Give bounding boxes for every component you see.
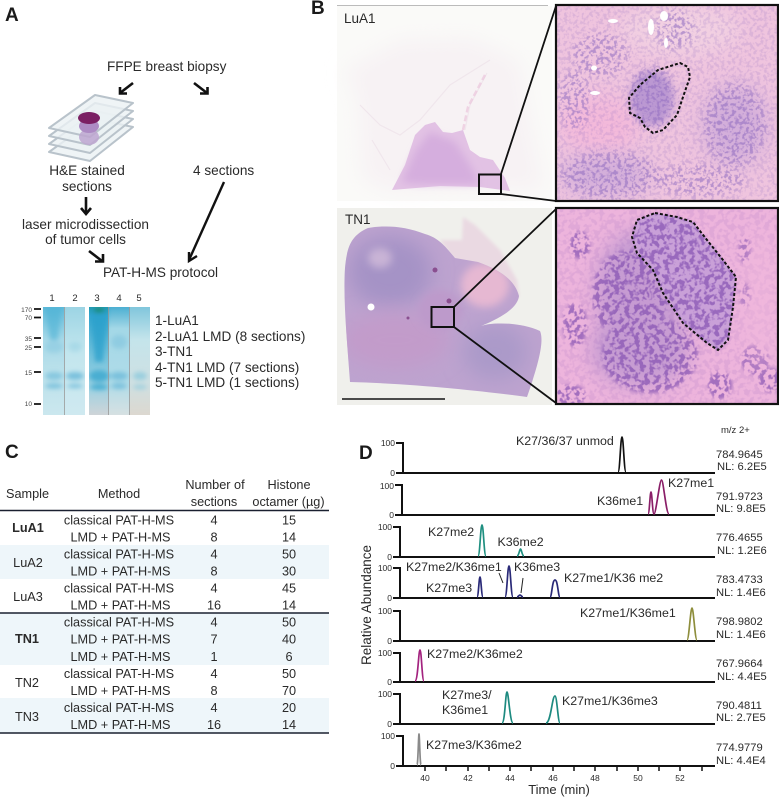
number of sections column: 1 bbox=[210, 650, 218, 664]
trace 3: K27me2 and K36me2: 776.4655 bbox=[716, 532, 763, 544]
number of sections column: 16 bbox=[207, 598, 221, 612]
number of sections column: 8 bbox=[210, 564, 218, 578]
trace 7: K27me3/K36me1 and K27me1/K36me3: 790.4811 bbox=[716, 700, 762, 712]
table header: Sample bbox=[6, 487, 49, 501]
trace 4: K27me3, K27me2/K36me1, K36me3, K27me1/K36me2: 100 bbox=[378, 563, 392, 573]
arrow: 4 sections to protocol bbox=[189, 182, 224, 261]
sample names: TN2 bbox=[15, 676, 39, 690]
histone octamer column bbox=[282, 514, 296, 732]
shaded rows bbox=[0, 545, 329, 733]
trace 3: K27me2 and K36me2: NL: 1.2E6 bbox=[717, 545, 767, 557]
text: 4 sections: 4 sections bbox=[193, 163, 254, 178]
sample names: TN3 bbox=[15, 710, 39, 724]
table header: octamer (µg) bbox=[252, 495, 325, 509]
trace 7: K27me3/K36me1 and K27me1/K36me3: 100 bbox=[378, 689, 392, 699]
histone octamer column: 14 bbox=[282, 530, 296, 544]
method column: classical PAT-H-MS bbox=[64, 701, 174, 715]
time axis labels: 46 bbox=[548, 773, 558, 783]
histone octamer column: 6 bbox=[285, 650, 293, 664]
trace 3: K27me2 and K36me2 bbox=[378, 522, 767, 562]
tumor outline bbox=[629, 63, 690, 133]
number of sections column: 8 bbox=[210, 684, 218, 698]
gel legend: 1-LuA1 bbox=[155, 313, 199, 328]
time axis labels: 48 bbox=[590, 773, 600, 783]
heading D: D bbox=[359, 443, 373, 464]
x axis title: Time (min) bbox=[528, 782, 590, 797]
scale bar bbox=[342, 398, 445, 400]
table header: Number of bbox=[185, 478, 245, 492]
histone octamer column: 30 bbox=[282, 564, 296, 578]
method column: classical PAT-H-MS bbox=[64, 667, 174, 681]
gel lane numbers: 3 bbox=[94, 293, 100, 304]
trace 8: K27me3/K36me2 with time axis: 774.9779 bbox=[716, 742, 763, 754]
table header bbox=[6, 478, 325, 509]
time axis labels bbox=[420, 773, 685, 783]
number of sections column: 7 bbox=[210, 632, 218, 646]
number of sections column: 16 bbox=[207, 718, 221, 732]
histone octamer column: 50 bbox=[282, 548, 296, 562]
table header: sections bbox=[191, 495, 237, 509]
text: PAT-H-MS protocol: PAT-H-MS protocol bbox=[103, 265, 218, 280]
trace 2: K27me1 and K36me1 bbox=[380, 476, 766, 520]
sample names bbox=[12, 521, 44, 724]
sample names: LuA1 bbox=[12, 521, 44, 535]
time axis labels: 42 bbox=[463, 773, 473, 783]
trace 4: K27me3, K27me2/K36me1, K36me3, K27me1/K36me2: K36me3 bbox=[514, 560, 560, 574]
gel lane numbers: 4 bbox=[116, 293, 122, 304]
number of sections column: 4 bbox=[210, 616, 218, 630]
trace 6: K27me2/K36me2: NL: 4.4E5 bbox=[717, 671, 767, 683]
method column: LMD + PAT-H-MS bbox=[71, 632, 170, 646]
sample names: LuA2 bbox=[13, 556, 43, 570]
gel legend bbox=[155, 313, 305, 390]
trace 2: K27me1 and K36me1: K27me1 bbox=[668, 476, 714, 490]
method column: classical PAT-H-MS bbox=[64, 582, 174, 596]
trace 4: K27me3, K27me2/K36me1, K36me3, K27me1/K36me2 bbox=[378, 560, 766, 603]
trace 2: K27me1 and K36me1: 100 bbox=[380, 481, 394, 491]
TN1 whole section bbox=[337, 208, 552, 405]
time axis labels: 52 bbox=[675, 773, 685, 783]
panel B: histology images bbox=[311, 0, 778, 405]
number of sections column: 4 bbox=[210, 701, 218, 715]
heading A: A bbox=[5, 5, 19, 26]
trace 3: K27me2 and K36me2: K27me2 bbox=[428, 525, 474, 539]
text: laser microdissection of tumor cells: laser microdissection bbox=[22, 217, 149, 232]
sample names: LuA3 bbox=[13, 590, 43, 604]
molecular weight marker: 70 bbox=[25, 315, 32, 322]
arrow: biopsy to stained sections bbox=[120, 83, 133, 94]
text: H&E stained sections: H&E stained bbox=[49, 163, 125, 178]
trace 5: K27me1/K36me1: K27me1/K36me1 bbox=[580, 606, 676, 620]
molecular weight marker bbox=[21, 307, 41, 408]
gel legend: 2-LuA1 LMD (8 sections) bbox=[155, 329, 305, 344]
gel lane numbers: 1 bbox=[49, 293, 55, 304]
text: FFPE breast biopsy: FFPE breast biopsy bbox=[107, 59, 227, 74]
time axis labels: 44 bbox=[505, 773, 515, 783]
heading C: C bbox=[5, 442, 19, 463]
LuA1 whole section bbox=[337, 6, 552, 201]
histone octamer column: 40 bbox=[282, 632, 296, 646]
method column bbox=[64, 514, 174, 732]
histone octamer column: 70 bbox=[282, 684, 296, 698]
trace 3: K27me2 and K36me2: 0 bbox=[387, 552, 392, 562]
gel legend: 3-TN1 bbox=[155, 344, 193, 359]
sample names: TN1 bbox=[15, 632, 39, 646]
molecular weight marker: 25 bbox=[25, 345, 32, 352]
trace 6: K27me2/K36me2: 0 bbox=[387, 677, 392, 687]
number of sections column: 4 bbox=[210, 667, 218, 681]
trace 1: unmodified: NL: 6.2E5 bbox=[717, 461, 767, 473]
trace 8: K27me3/K36me2 with time axis: K27me3/K36me2 bbox=[426, 738, 522, 752]
trace 5: K27me1/K36me1: 798.9802 bbox=[716, 616, 763, 628]
number of sections column: 4 bbox=[210, 548, 218, 562]
trace 7: K27me3/K36me1 and K27me1/K36me3: K27me1/K36me3 bbox=[562, 694, 658, 708]
trace 2: K27me1 and K36me1: NL: 9.8E5 bbox=[716, 503, 766, 515]
gel image bbox=[21, 293, 150, 415]
histone octamer column: 15 bbox=[282, 514, 296, 528]
text: H&E stained sections: sections bbox=[62, 179, 112, 194]
trace 4: K27me3, K27me2/K36me1, K36me3, K27me1/K36me2: NL: 1.4E6 bbox=[716, 587, 766, 599]
trace 5: K27me1/K36me1 bbox=[378, 606, 766, 646]
number of sections column: 4 bbox=[210, 514, 218, 528]
trace 6: K27me2/K36me2: 767.9664 bbox=[716, 658, 763, 670]
method column: LMD + PAT-H-MS bbox=[71, 564, 170, 578]
trace 8: K27me3/K36me2 with time axis: 0 bbox=[390, 761, 395, 771]
trace 7: K27me3/K36me1 and K27me1/K36me3: K36me1 bbox=[442, 703, 488, 717]
trace 4: K27me3, K27me2/K36me1, K36me3, K27me1/K36me2: 0 bbox=[387, 593, 392, 603]
trace 7: K27me3/K36me1 and K27me1/K36me3: K27me3/ bbox=[442, 688, 492, 702]
tumor outline bbox=[632, 213, 736, 350]
gel legend: 4-TN1 LMD (7 sections) bbox=[155, 360, 299, 375]
trace 7: K27me3/K36me1 and K27me1/K36me3 bbox=[378, 688, 766, 729]
arrow: sections to laser microdissection bbox=[81, 197, 91, 214]
histone octamer column: 45 bbox=[282, 582, 296, 596]
time axis ticks bbox=[425, 766, 702, 771]
molecular weight marker: 35 bbox=[25, 336, 32, 343]
trace 3: K27me2 and K36me2: K36me2 bbox=[498, 535, 544, 549]
panel D: extracted ion chromatograms bbox=[359, 425, 767, 797]
trace 4: K27me3, K27me2/K36me1, K36me3, K27me1/K36me2: K27me2/K36me1 bbox=[406, 560, 502, 574]
header m/z 2+: m/z 2+ bbox=[721, 425, 750, 436]
gel legend: 5-TN1 LMD (1 sections) bbox=[155, 375, 299, 390]
number of sections column: 4 bbox=[210, 582, 218, 596]
time axis labels: 50 bbox=[633, 773, 643, 783]
trace 6: K27me2/K36me2 bbox=[378, 647, 767, 687]
molecular weight marker: 170 bbox=[21, 307, 32, 314]
label TN1: TN1 bbox=[345, 212, 371, 227]
method column: classical PAT-H-MS bbox=[64, 548, 174, 562]
gel lane numbers bbox=[49, 293, 142, 304]
table header: Histone bbox=[267, 478, 311, 492]
label LuA1: LuA1 bbox=[344, 11, 376, 26]
TN1 zoom box and connector bbox=[432, 209, 556, 403]
trace 3: K27me2 and K36me2: 100 bbox=[378, 522, 392, 532]
trace 8: K27me3/K36me2 with time axis: 100 bbox=[381, 731, 395, 741]
trace 1: unmodified bbox=[381, 434, 767, 478]
trace 1: unmodified: K27/36/37 unmod bbox=[516, 434, 614, 448]
number of sections column bbox=[207, 514, 221, 732]
trace 2: K27me1 and K36me1: K36me1 bbox=[597, 494, 643, 508]
LuA1 zoom box and connector bbox=[479, 6, 556, 201]
trace 6: K27me2/K36me2: 100 bbox=[378, 648, 392, 658]
trace 7: K27me3/K36me1 and K27me1/K36me3: 0 bbox=[387, 719, 392, 729]
trace 4: K27me3, K27me2/K36me1, K36me3, K27me1/K36me2: K27me1/K36 me2 bbox=[564, 571, 663, 585]
trace 1: unmodified: 100 bbox=[381, 438, 395, 448]
trace 5: K27me1/K36me1: NL: 1.4E6 bbox=[716, 629, 766, 641]
number of sections column: 8 bbox=[210, 530, 218, 544]
trace 7: K27me3/K36me1 and K27me1/K36me3: NL: 2.7E5 bbox=[716, 712, 766, 724]
histone octamer column: 20 bbox=[282, 701, 296, 715]
histone octamer column: 50 bbox=[282, 667, 296, 681]
molecular weight marker: 15 bbox=[25, 370, 32, 377]
method column: LMD + PAT-H-MS bbox=[71, 530, 170, 544]
text: laser microdissection of tumor cells: of tumor cells bbox=[45, 232, 126, 247]
trace 2: K27me1 and K36me1: 791.9723 bbox=[716, 491, 763, 503]
panel A: workflow and gel bbox=[5, 5, 305, 415]
histone octamer column: 14 bbox=[282, 598, 296, 612]
time axis labels: 40 bbox=[420, 773, 430, 783]
LuA1 inset bbox=[556, 5, 778, 201]
trace 5: K27me1/K36me1: 0 bbox=[387, 636, 392, 646]
trace 5: K27me1/K36me1: 100 bbox=[378, 606, 392, 616]
histone octamer column: 14 bbox=[282, 718, 296, 732]
TN1 inset bbox=[556, 208, 778, 404]
trace 8: K27me3/K36me2 with time axis: NL: 4.4E4 bbox=[716, 755, 766, 767]
arrow: biopsy to 4 sections bbox=[194, 83, 208, 94]
molecular weight marker: 10 bbox=[25, 401, 32, 408]
trace 4: K27me3, K27me2/K36me1, K36me3, K27me1/K36me2: 783.4733 bbox=[716, 574, 763, 586]
method column: LMD + PAT-H-MS bbox=[71, 650, 170, 664]
trace 8: K27me3/K36me2 with time axis bbox=[381, 731, 766, 771]
trace 1: unmodified: 784.9645 bbox=[716, 449, 763, 461]
histone octamer column: 50 bbox=[282, 616, 296, 630]
table header: Method bbox=[98, 487, 140, 501]
trace 6: K27me2/K36me2: K27me2/K36me2 bbox=[427, 647, 523, 661]
panel C: sample table bbox=[0, 442, 329, 733]
y axis title: Relative Abundance bbox=[359, 545, 374, 665]
method column: LMD + PAT-H-MS bbox=[71, 684, 170, 698]
arrow: microdissection to protocol bbox=[89, 251, 103, 262]
trace 1: unmodified: 0 bbox=[390, 468, 395, 478]
icon: stacked tissue slides bbox=[49, 95, 133, 161]
gel lane numbers: 2 bbox=[72, 293, 78, 304]
gel lane numbers: 5 bbox=[136, 293, 142, 304]
trace 2: K27me1 and K36me1: 0 bbox=[389, 510, 394, 520]
trace 4: K27me3, K27me2/K36me1, K36me3, K27me1/K36me2: K27me3 bbox=[426, 581, 472, 595]
method column: classical PAT-H-MS bbox=[64, 514, 174, 528]
method column: classical PAT-H-MS bbox=[64, 616, 174, 630]
method column: LMD + PAT-H-MS bbox=[71, 598, 170, 612]
method column: LMD + PAT-H-MS bbox=[71, 718, 170, 732]
